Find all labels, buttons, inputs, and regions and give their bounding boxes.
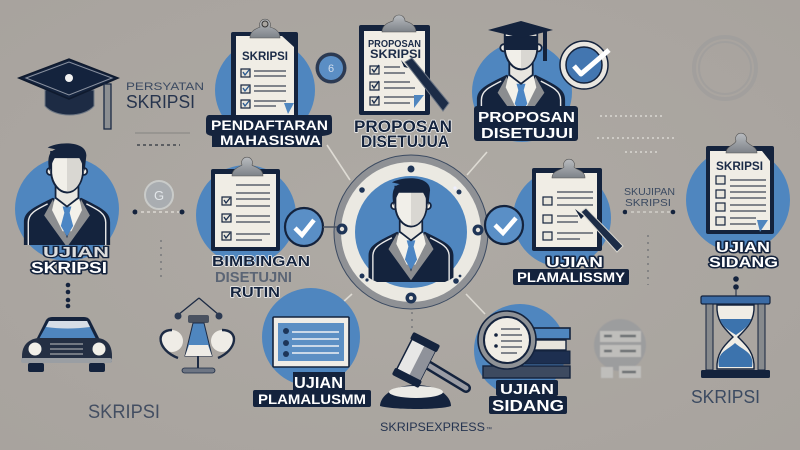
icon: clipboard: SKRIPSI [716,159,763,173]
text: skujipan skripsi [623,187,675,214]
panel: pendaftaran mahasiswa [206,19,332,148]
text: skripsi left: SKRIPSI [88,402,160,423]
label: ujian plamalusmm: PLAMALUSMM [258,391,366,407]
icon: blue disc [355,176,467,288]
brand text: skripsexpress: ™ [486,426,492,433]
icon: graduate figure [477,21,565,127]
icon: magnifier [478,311,536,369]
faint vertical connectors [161,235,648,330]
icon: clipboard with checklist: SKRIPSI [242,49,288,63]
icon: blue circle backdrop [686,148,790,252]
heading: persyaratan skripsi [126,81,204,112]
label: bimbingan disetujui rutin: BIMBINGAN [212,254,310,270]
label: ujian plamalusmm [253,372,371,407]
icon: check badge [285,208,337,246]
label: proposan disetujui: DISETUJUI [481,126,573,142]
label: bimbingan disetujui rutin: DISETUJNI [215,270,292,286]
panel: ujian plagiarisme monitor [253,288,371,407]
icon: small numbered badge: 6 [328,63,334,75]
gavel head [392,332,440,388]
icon: proposal clipboard with pen: PROPOSAN [368,39,421,50]
icon: faded circle: G [154,188,164,203]
icon: faded circle [145,181,173,209]
icon: person [24,143,110,249]
text: skripsi right: SKRIPSI [691,387,760,407]
icon: white ring [341,162,481,302]
brand text: skripsexpress: SKRIPSEXPRESS [380,420,485,434]
text: skujipan skripsi: SKRIPSI [625,197,671,209]
icon: hourglass [701,296,770,378]
icon: monitor [273,317,349,367]
icon: blue circle backdrop [262,288,360,386]
label: proposan disetujua: DISETUJUA [361,133,449,151]
panel: ujian sidang right [686,133,790,271]
icon: blue circle backdrop [15,157,119,261]
text: skujipan skripsi: SKUJIPAN [624,187,675,198]
label: ujian plamalusmm: UJIAN [294,375,343,392]
dots above hourglass [733,276,739,296]
icon: check badge [485,206,523,244]
gavel base [380,385,451,409]
icon: car [21,317,112,372]
icon: small numbered badge [316,52,346,84]
label: ujian plamalissmy: PLAMALISSMY [517,270,625,285]
label: proposan disetujui [474,106,578,142]
label: proposan disetujua: PROPOSAN [354,118,452,136]
icon: central person [369,178,453,282]
icon: scale [161,298,234,373]
label: ujian skripsi: UJIAN [43,244,109,261]
icon: outer ring [334,155,488,309]
label: proposan disetujua [354,118,452,151]
icon: blue circle backdrop [474,304,566,396]
label: ujian sidang: UJIAN [500,381,554,398]
label: pendaftaran mahasiswa: MAHASISWA [220,132,321,148]
icon: faded ring [694,37,756,99]
panel: proposan disetujua [354,15,452,151]
icon: faded server [594,319,646,378]
icon: clipboard [211,157,280,251]
label: ujian sidang: SIDANG [709,254,778,271]
icon: gavel [380,332,466,409]
panel: proposan disetujui [472,21,609,142]
label: proposan disetujui: PROPOSAN [478,110,575,126]
panel: ujian skripsi [15,143,119,277]
arrow: connector lines to centre [327,145,487,314]
panel: ujian sidang books [474,304,570,415]
dots above car [66,283,70,308]
icon: ring dots [336,166,484,304]
label: pendaftaran mahasiswa [206,115,332,148]
icon: blue circle backdrop [513,169,611,267]
label: bimbingan disetujui rutin: RUTIN [230,285,280,301]
dotted connectors right [597,116,675,152]
icon: proposal clipboard with pen [359,15,449,115]
icon: blue circle backdrop [196,165,296,265]
label: ujian plamalissmy: UJIAN [546,254,603,271]
label: ujian sidang [489,380,567,415]
panel: ujian plamalissmy [485,159,629,285]
icon: proposal clipboard with pen: SKRIPSI [370,47,421,61]
label: ujian sidang [709,239,778,271]
label: ujian skripsi: SKRIPSI [31,260,107,277]
label: ujian sidang: SIDANG [492,398,564,415]
label: bimbingan disetujui rutin [212,254,310,301]
icon: check badge [560,41,609,89]
icon: graduation cap [19,59,118,129]
dotted connector with end dots [132,210,184,214]
icon: blue circle backdrop [472,42,572,142]
icon: stack of books [483,328,570,378]
label: ujian skripsi [31,244,109,277]
label: ujian plamalissmy [513,254,629,285]
heading: persyaratan skripsi: SKRIPSI [126,92,195,112]
icon: blue circle backdrop [215,40,315,140]
label: pendaftaran mahasiswa: PENDAFTARAN [211,117,328,133]
panel: bimbingan rutin [196,157,337,301]
label: ujian sidang: UJIAN [716,239,770,256]
icon: clipboard with pen [532,159,623,252]
panel: central figure [334,155,488,309]
heading: persyaratan skripsi: PERSYATAN [126,81,204,93]
gavel handle [428,365,466,388]
